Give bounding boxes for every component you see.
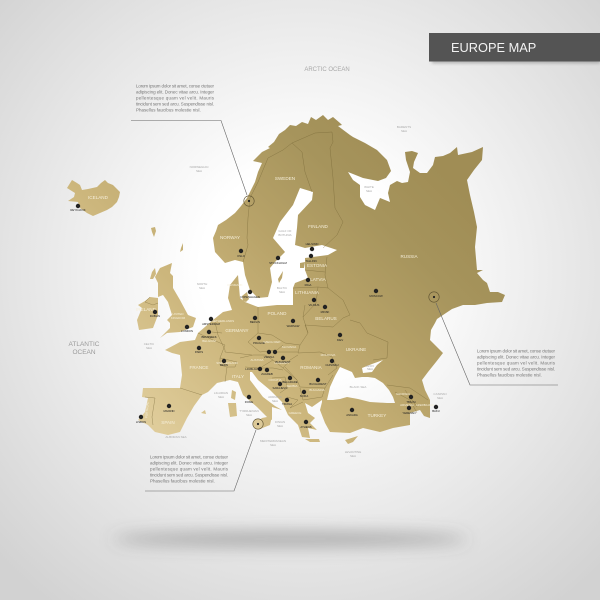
sea labels: IONIAN [275,420,285,424]
sea labels: ALBORAN SEA [165,435,187,439]
capital names: VILNIUS [309,303,320,307]
capital names: KIEV [337,338,343,342]
sea labels: ADRIATIC [268,395,283,399]
capital names: TBILISI [406,400,416,404]
sea labels: MEDITERRANEAN [260,439,286,443]
capital names: PARIS [195,350,203,354]
capital names: SOFIA [300,394,308,398]
capital names: HELSINKI [306,242,319,246]
callout: right: pellentesque quam vel velit. Mauris [477,360,556,366]
capital names: MINSK [321,310,330,314]
country labels: ESTONIA [307,263,328,268]
callout: top left: Lorem ipsum dolor sit amet, conse ctetuer [136,84,214,88]
sea labels: GULF OF [278,229,292,233]
sea labels: SEA [367,367,373,371]
country labels: AZERBAIJAN [416,403,434,407]
country labels: ITALY [232,374,244,379]
ground shadow [112,531,468,547]
callout: top left: adipiscing elit. Donec vitae arcu. Integer [136,90,214,94]
ocean label: Atlantic: OCEAN [72,349,96,356]
capital names: BRUSSELS [202,335,217,339]
sea labels: AZOV [366,364,374,368]
callout: right: tincidunt sem sed arcu. Suspendisse nisl. [477,366,555,372]
callout: top left: pellentesque quam vel velit. Mauris [136,96,215,100]
country labels: PORTUGAL [144,401,150,418]
country labels: SWEDEN [275,176,295,181]
country labels: FINLAND [308,224,329,229]
country labels: UNITED [172,312,184,316]
country labels: SPAIN [161,420,175,425]
callout: bottom left: adipiscing elit. Donec vitae arcu. Integer [150,460,228,466]
sea labels: BLACK SEA [350,385,366,389]
sea labels: BALTIC [277,286,288,290]
country labels: GERMANY [225,328,249,333]
capital names: OSLO [237,254,246,258]
capital names: AMSTERDAM [202,322,221,326]
callout: top left [131,84,254,206]
sea labels: SEA [246,413,252,417]
country labels: FRANCE [190,365,208,370]
country labels: GEORGIA [396,392,410,396]
country labels: SERBIA [286,384,298,388]
country labels: LATVIA [310,277,327,282]
callout: right: Lorem ipsum dolor sit amet, conse ctetuer [477,348,556,354]
capital names: LISBON [136,420,146,424]
callout: bottom left [145,419,263,491]
sea labels: NORWEGIAN [190,165,208,169]
sea labels: SEA [196,169,202,173]
country labels: RUSSIA [400,254,418,259]
country labels: SWITZERLAND [216,361,239,365]
sea labels: WHITE [364,185,374,189]
sea labels: LIGURIAN [214,391,228,395]
callout: bottom left: tincidunt sem sed arcu. Suspendisse nisl. [150,472,228,478]
ocean label: Arctic: ARCTIC OCEAN [304,67,350,73]
sea labels: SEA [218,395,224,399]
capital markers [76,204,438,424]
capital names: BUCHAREST [309,382,327,386]
country labels: MOLDOVA [321,353,335,357]
country labels: CZECH REP. [263,340,281,344]
country labels: LITHUANIA [295,290,320,295]
country labels: ROMANIA [300,365,323,370]
capital names: TALLINN [305,259,317,263]
capital names: LONDON [181,329,193,333]
sea labels: CELTIC [144,342,155,346]
callout: bottom left: pellentesque quam vel velit. Mauris [150,466,229,472]
capital names: VIENNA [264,355,274,359]
ocean label: Atlantic [69,341,100,356]
callout: right [429,292,558,385]
map of Europe [67,115,505,458]
country labels: IRELAND [136,307,157,312]
capital names: ZAGREB [261,372,273,376]
capital names: BUDAPEST [275,360,291,364]
capital names: SARAJEVO [273,386,288,390]
callout: right: adipiscing elit. Donec vitae arcu. Integer [477,354,556,360]
title bar: EUROPE MAP [451,40,536,55]
callout: bottom left: Phasellus faucibus molestie nisl. [150,478,215,484]
country labels: BULGARIA [309,388,325,392]
Great Britain [155,263,196,338]
capital names: BERN [220,363,228,367]
country labels: HUNGARY [275,361,289,365]
ocean label: Atlantic: ATLANTIC [69,341,100,348]
sea labels: TYRRHENIAN [239,409,259,413]
country labels: ARMENIA [400,403,414,407]
capital names: BERLIN [250,320,260,324]
capital names: MOSCOW [369,294,383,298]
country labels: SLOVAKIA [282,345,296,349]
country labels: AUSTRIA [250,358,264,362]
country labels: UKRAINE [346,347,366,352]
capital names: TIRANA [282,402,292,406]
sea labels: SEA [279,290,285,294]
Ireland [137,297,158,330]
capital names: REYKJAVIK [70,208,86,212]
capital names: ROME [245,400,253,404]
country labels: POLAND [268,311,287,316]
callout: right: Phasellus faucibus molestie nisl. [477,372,542,378]
sea labels: BOTHNIA [278,233,292,237]
capital names: DUBLIN [150,314,160,318]
sea labels: SEA [350,454,356,458]
country labels [88,176,434,425]
capital names: WARSAW [287,324,300,328]
title bar [429,33,600,63]
country labels: TURKEY [368,413,386,418]
capital names: RIGA [305,283,312,287]
sea labels: LEVANTINE [345,450,361,454]
country labels: ICELAND [88,195,109,200]
islands [150,227,358,444]
capital names: CHISINAU [325,363,339,367]
mainland [138,115,505,438]
country labels: NORWAY [220,235,240,240]
country labels: NETHERLANDS [212,319,234,323]
sea labels: SEA [146,346,152,350]
callout: top left: tincidunt sem sed arcu. Suspendisse nisl. [136,102,214,106]
capital names: MADRID [163,409,175,413]
capital names: PRAGUE [253,341,265,345]
country labels: DENMARK [227,283,243,287]
capital names: ANKARA [346,413,358,417]
callout: top left: Phasellus faucibus molestie nisl. [136,108,201,112]
country labels: BELGIUM [202,339,216,343]
sea labels: SEA [366,189,372,193]
country labels: CROATIA [268,378,282,382]
sea labels: NORTH [197,282,207,286]
capital names: COPENHAGEN [240,295,260,299]
sea labels: SEA [401,129,407,133]
sea labels: SEA [277,424,283,428]
capital names: BAKU [432,409,440,413]
sea labels: SEA [270,443,276,447]
Iceland [67,180,120,216]
country labels: BELARUS [315,316,337,321]
country labels: KINGDOM [171,316,186,320]
capital names [70,208,440,429]
capital names: STOCKHOLM [269,261,287,265]
sea labels: CASPIAN [433,392,447,396]
sea labels: SEA [437,396,443,400]
capital names: BELGRADE [282,380,298,384]
sea labels: SEA [199,286,205,290]
sea labels: BARENTS [397,125,411,129]
country labels: GREECE [289,411,301,415]
country borders [145,132,428,425]
capital names: LJUBLJANA [245,367,261,371]
sea labels: SEA [272,399,278,403]
sea labels [144,125,447,458]
capital names: YEREVAN [402,411,416,415]
callout: bottom left: Lorem ipsum dolor sit amet, conse ctetuer [150,454,228,460]
capital names: ATHENS [300,425,312,429]
